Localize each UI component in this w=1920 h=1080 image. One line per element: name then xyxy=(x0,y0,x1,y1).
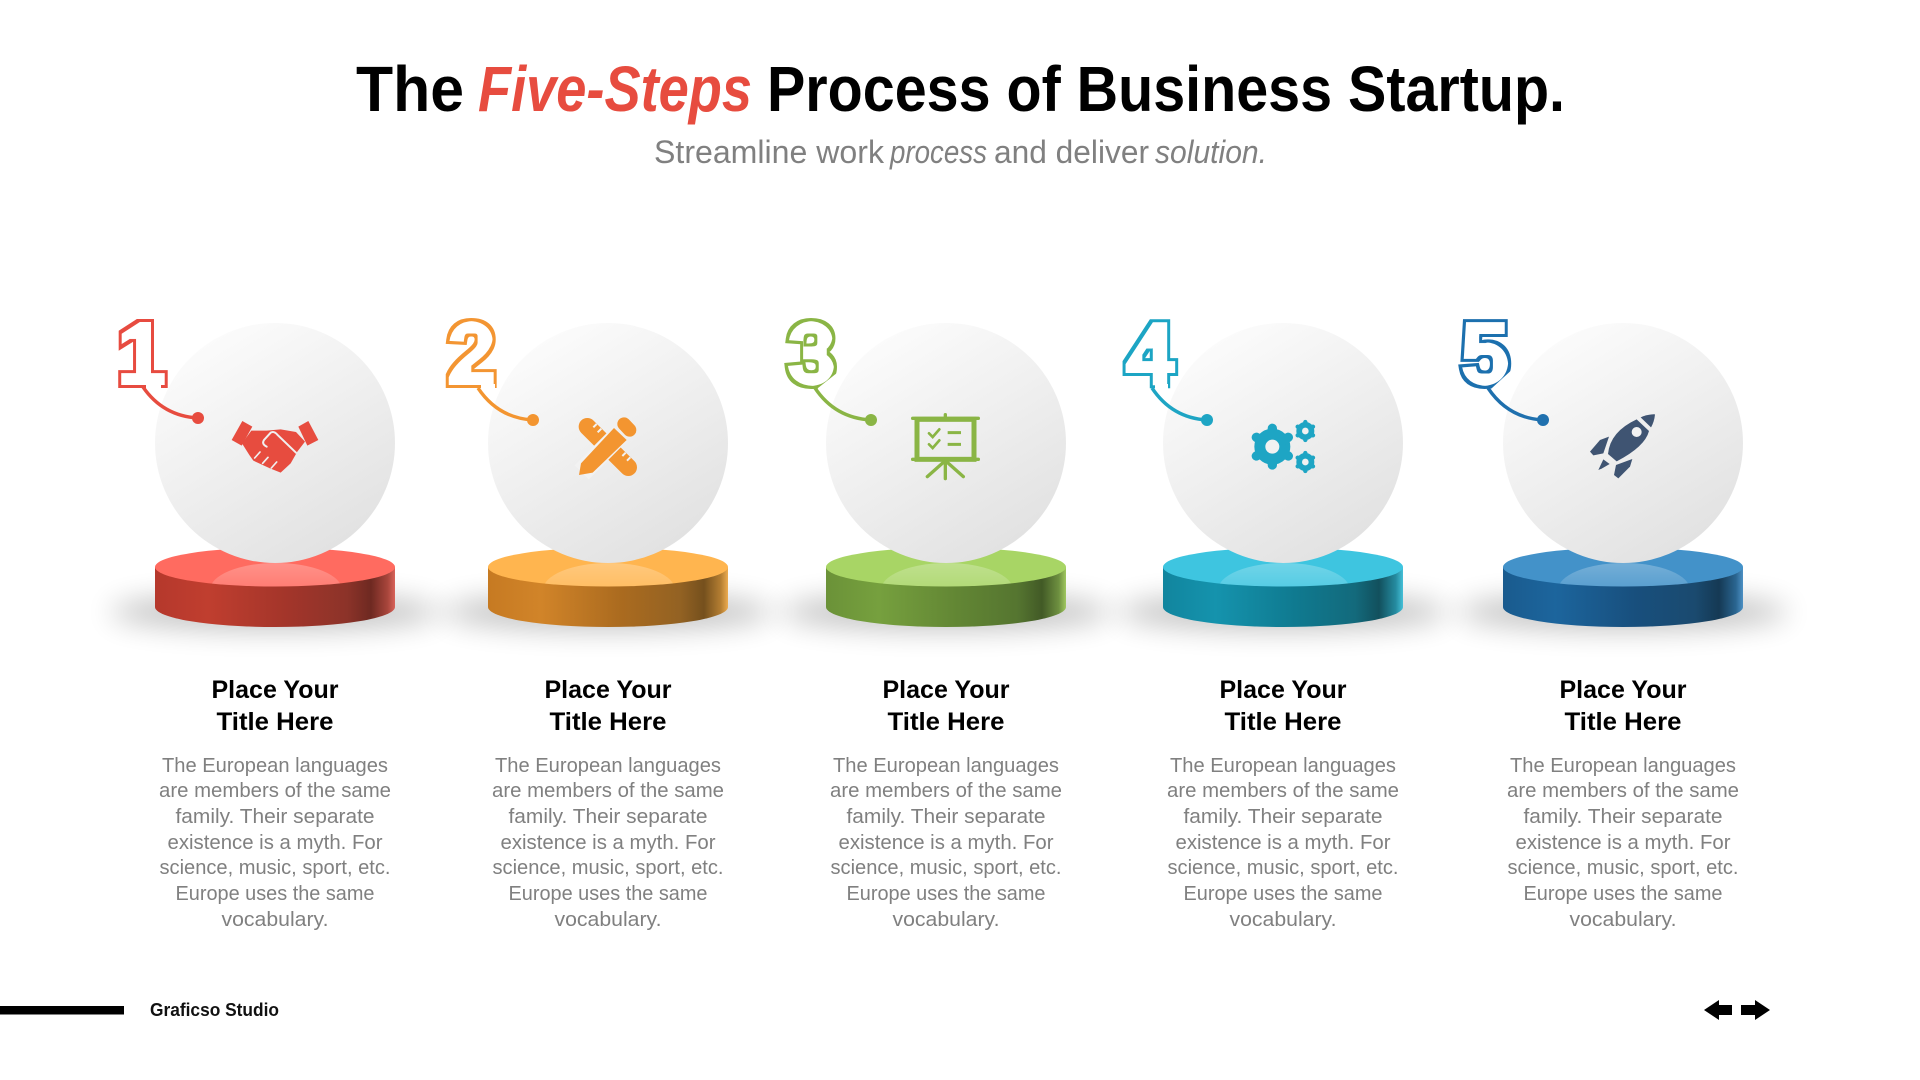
step 4 description: The European languages xyxy=(1170,754,1396,777)
sphere 2 xyxy=(488,323,728,563)
step 5 heading xyxy=(1560,676,1687,736)
step 3 description: science, music, sport, etc. xyxy=(830,856,1062,879)
footer studio name: Graficso Studio xyxy=(150,999,279,1020)
step 3 description: vocabulary. xyxy=(892,908,1000,931)
pedestal 1 xyxy=(110,548,440,630)
title xyxy=(356,53,1565,125)
step 2 heading: Place Your xyxy=(544,676,672,704)
title: Process of Business Startup. xyxy=(767,53,1565,125)
step 1 description: are members of the same xyxy=(159,779,391,802)
icon: rocket xyxy=(1590,414,1655,478)
step 1 heading: Title Here xyxy=(216,708,334,736)
step 2 heading xyxy=(544,676,672,736)
step 2 description: existence is a myth. For xyxy=(500,831,716,854)
number 5 with connector xyxy=(1461,306,1549,426)
step 5 description: science, music, sport, etc. xyxy=(1508,856,1738,879)
subtitle: process xyxy=(889,134,987,170)
panel: step 5 xyxy=(1458,306,1788,931)
number 4 with connector xyxy=(1126,306,1213,426)
step 3 heading: Place Your xyxy=(882,676,1010,704)
step 3 description: existence is a myth. For xyxy=(838,831,1054,854)
step 2 description: The European languages xyxy=(495,754,721,777)
step 4 heading: Title Here xyxy=(1224,708,1342,736)
panel: step 2 xyxy=(443,306,773,931)
sphere 1 xyxy=(155,323,395,563)
panel: step 3 xyxy=(781,306,1111,931)
panel: step 1 xyxy=(110,306,440,931)
step 5 description xyxy=(1507,754,1739,931)
sphere 3 xyxy=(826,323,1066,563)
number 3 with connector: 3 xyxy=(787,306,836,402)
panel: step 4 xyxy=(1118,306,1448,931)
step 4 description: family. Their separate xyxy=(1184,805,1382,828)
step 3 description: Europe uses the same xyxy=(846,882,1046,905)
step 3 heading xyxy=(882,676,1010,736)
step 5 description: are members of the same xyxy=(1507,779,1739,802)
icon: pencil and ruler xyxy=(579,424,630,475)
step 4 description: vocabulary. xyxy=(1230,908,1336,931)
arrow: previous xyxy=(1704,1000,1732,1020)
step 2 description: family. Their separate xyxy=(508,805,708,828)
sphere 5 xyxy=(1503,323,1743,563)
title: Five-Steps xyxy=(478,53,752,125)
step 5 description: existence is a myth. For xyxy=(1516,831,1731,854)
number 2 with connector xyxy=(447,306,539,426)
step 3 description: The European languages xyxy=(833,754,1059,777)
number 1 with connector xyxy=(118,319,204,424)
step 5 description: Europe uses the same xyxy=(1524,882,1722,905)
step 3 description: family. Their separate xyxy=(846,805,1046,828)
step 4 description: are members of the same xyxy=(1167,779,1399,802)
step 2 description: Europe uses the same xyxy=(508,882,708,905)
step 3 description xyxy=(830,754,1062,931)
step 3 description: are members of the same xyxy=(830,779,1062,802)
step 1 description: science, music, sport, etc. xyxy=(160,856,390,879)
step 1 heading xyxy=(212,676,339,736)
step 1 description: The European languages xyxy=(162,754,388,777)
step 4 description: science, music, sport, etc. xyxy=(1168,856,1398,879)
step 4 description xyxy=(1167,754,1399,931)
step 4 description: existence is a myth. For xyxy=(1176,831,1391,854)
number 5 with connector: 5 xyxy=(1461,306,1509,402)
icon: presentation board xyxy=(913,415,978,479)
step 4 heading xyxy=(1220,676,1347,736)
title: The xyxy=(356,53,464,125)
number 1 with connector: 1 xyxy=(117,306,166,402)
number 3 with connector xyxy=(787,306,877,426)
step 1 heading: Place Your xyxy=(212,676,339,704)
subtitle: Streamline work xyxy=(654,134,885,170)
number 2 with connector: 2 xyxy=(447,306,496,402)
step 1 description: vocabulary. xyxy=(222,908,328,931)
icon: gears xyxy=(1256,422,1313,471)
icon: handshake xyxy=(232,421,318,473)
step 5 description: The European languages xyxy=(1510,754,1736,777)
step 5 heading: Place Your xyxy=(1560,676,1687,704)
pedestal 5 xyxy=(1458,548,1788,630)
step 3 heading: Title Here xyxy=(888,708,1005,736)
step 5 description: vocabulary. xyxy=(1570,908,1676,931)
pedestal 4 xyxy=(1118,548,1448,630)
number 4 with connector: 4 xyxy=(1126,306,1174,402)
step 5 description: family. Their separate xyxy=(1524,805,1722,828)
pedestal 3 xyxy=(781,548,1111,630)
step 1 description: Europe uses the same xyxy=(176,882,374,905)
step 4 heading: Place Your xyxy=(1220,676,1347,704)
step 2 description: are members of the same xyxy=(492,779,724,802)
subtitle: solution. xyxy=(1155,134,1267,170)
step 1 description xyxy=(159,754,391,931)
subtitle xyxy=(654,134,1267,170)
footer bar xyxy=(0,1006,124,1014)
pedestal 2 xyxy=(443,548,773,630)
step 2 description xyxy=(492,754,724,931)
step 1 description: family. Their separate xyxy=(176,805,374,828)
step 2 description: science, music, sport, etc. xyxy=(492,856,724,879)
step 2 description: vocabulary. xyxy=(554,908,662,931)
subtitle: and deliver xyxy=(994,134,1149,170)
step 4 description: Europe uses the same xyxy=(1184,882,1382,905)
step 5 heading: Title Here xyxy=(1564,708,1682,736)
step 2 heading: Title Here xyxy=(550,708,667,736)
arrow: next xyxy=(1741,1000,1770,1020)
step 1 description: existence is a myth. For xyxy=(168,831,383,854)
sphere 4 xyxy=(1163,323,1403,563)
